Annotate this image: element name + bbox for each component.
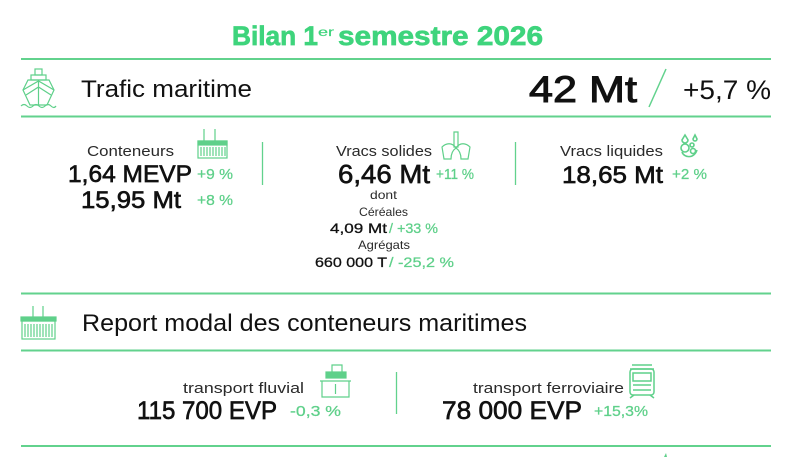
icon: train [630,365,654,398]
value: vracs solides: 6,46 Mt [338,159,431,189]
total tonnage: 42 Mt [529,69,638,110]
icon: ship [21,69,56,108]
panel: vracs solides [315,132,474,270]
title: er [318,25,334,39]
title: semestre 2026 [338,21,543,51]
icon: container [198,129,227,158]
icon: droplets [681,135,697,157]
panel: transport ferroviaire [442,365,654,425]
heading: trafic maritime: Trafic maritime [81,76,252,103]
change: vracs liquides: +2 % [672,166,707,183]
icon: grab [442,132,470,159]
value: agrégats: 660 000 T [315,254,388,270]
change: fluvial: -0,3 % [290,403,341,420]
total change: +5,7 % [683,75,771,105]
icon: barge [320,365,351,397]
icon: container [21,306,56,339]
heading: report modal: Report modal des conteneurs maritimes [82,310,527,337]
title: Bilan 1 [232,21,318,51]
panel: report modal header [21,306,527,339]
value: Mt: 15,95 Mt [81,187,181,214]
panel: transport fluvial [137,365,351,425]
label: transport fluvial: transport fluvial [183,380,304,397]
label: conteneurs: Conteneurs [87,144,174,160]
panel: trafic maritime header [21,69,771,110]
label: agrégats: Agrégats [358,238,410,252]
change: ferroviaire: +15,3% [594,403,648,420]
label: céréales: Céréales [359,205,408,219]
value: céréales: 4,09 Mt [330,220,387,236]
slash [649,69,666,107]
label: vracs liquides: Vracs liquides [560,144,663,160]
change: céréales: / +33 % [389,220,438,236]
change: vracs solides: +11 % [436,166,474,183]
label: dont: dont [370,188,398,202]
label: transport ferroviaire: transport ferroviaire [473,380,624,397]
title [232,21,543,51]
change: MEVP: +9 % [197,166,233,183]
value: ferroviaire: 78 000 EVP [442,397,582,425]
icon: cropped marker at bottom edge [664,453,667,457]
label: vracs solides: Vracs solides [336,144,432,160]
value: MEVP: 1,64 MEVP [68,161,192,188]
change: Mt: +8 % [197,192,233,209]
value: fluvial: 115 700 EVP [137,397,277,425]
change: agrégats: / -25,2 % [389,254,454,270]
value: vracs liquides: 18,65 Mt [562,162,663,189]
panel: vracs liquides [560,135,707,189]
panel: conteneurs [68,129,233,214]
